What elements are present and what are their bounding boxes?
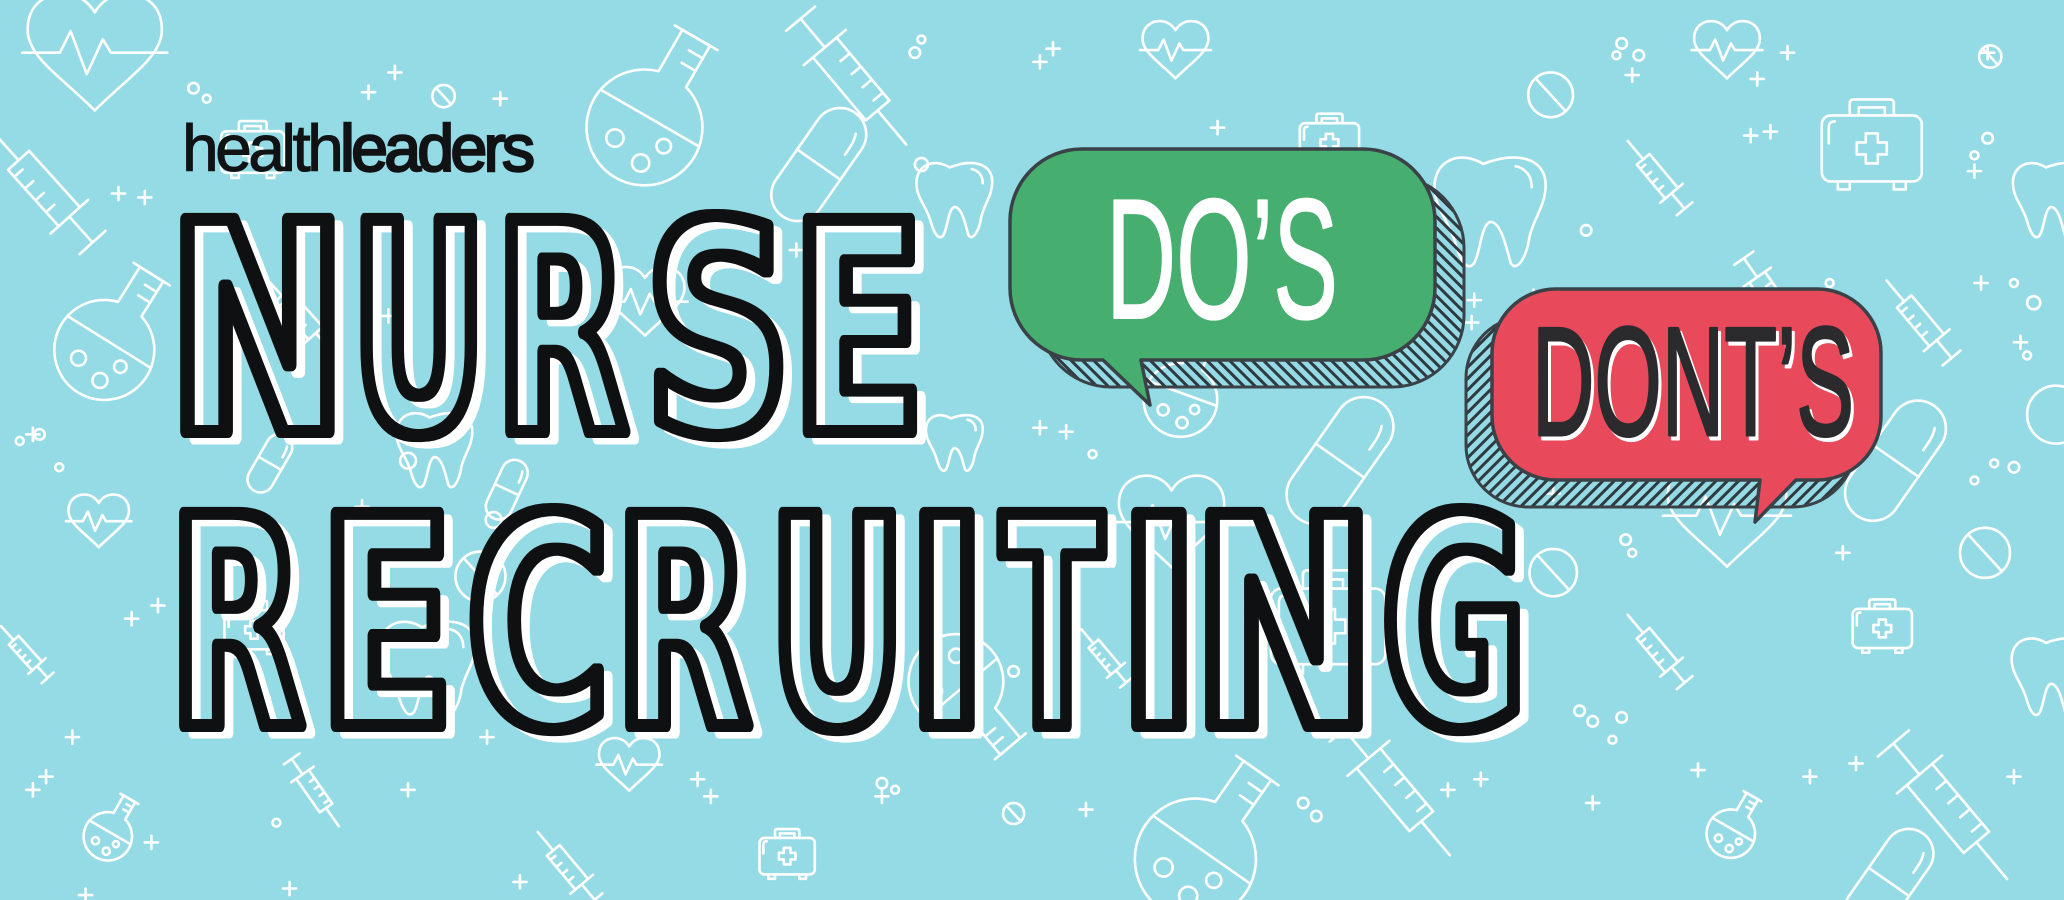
title word: RECRUITING: E (320, 456, 454, 795)
title word: NURSE: N (168, 163, 347, 501)
title word shadow: RECRUITING (178, 462, 1535, 802)
title word: RECRUITING: G (1382, 456, 1526, 794)
title word: RECRUITING: U (769, 456, 905, 794)
title word shadow: NURSE: N (177, 170, 356, 508)
label: DO'S: DO’S (1106, 164, 1338, 355)
green bubble body with tail (1010, 149, 1435, 405)
title word: RECRUITING: I (906, 455, 987, 795)
title word: RECRUITING: R (615, 456, 751, 795)
title word shadow: NURSE: E (801, 169, 933, 508)
title word: RECRUITING: N (1192, 455, 1376, 794)
hatched bubble shadow (1466, 316, 1855, 507)
title word: RECRUITING: R (170, 455, 304, 795)
title word: NURSE: S (645, 162, 791, 501)
logo: healthleaders: healthleaders (182, 111, 535, 185)
title word shadow: RECRUITING: I (916, 462, 996, 802)
title word shadow: RECRUITING: T (1010, 464, 1112, 802)
title word: NURSE: U (351, 161, 486, 500)
title word shadow: RECRUITING: U (778, 463, 914, 801)
speech bubble: Dont's (1466, 289, 1881, 522)
title word shadow: RECRUITING: C (476, 463, 619, 802)
title word shadow: RECRUITING: G (1391, 463, 1535, 801)
title word shadow: RECRUITING: R (178, 462, 313, 802)
title: Nurse Recruiting (168, 161, 1535, 802)
title word: NURSE: E (792, 162, 924, 501)
red bubble body with tail (1492, 289, 1881, 522)
title word shadow: RECRUITING: I (1128, 462, 1208, 802)
title word shadow: NURSE: R (505, 169, 637, 508)
title word shadow: RECRUITING: R (624, 463, 760, 802)
title word: NURSE (168, 161, 924, 501)
title word shadow: NURSE: U (360, 168, 495, 507)
speech bubble: Do's (1010, 149, 1464, 405)
hatched bubble shadow (1039, 176, 1464, 387)
title word: NURSE: R (496, 162, 628, 501)
title word: RECRUITING: C (467, 456, 610, 795)
title word: RECRUITING (170, 455, 1526, 795)
title word shadow: NURSE: S (654, 169, 800, 508)
title word: RECRUITING: T (1001, 457, 1103, 795)
title word shadow: RECRUITING: E (328, 463, 463, 802)
title word shadow: RECRUITING: N (1201, 462, 1385, 801)
title word: RECRUITING: I (1118, 455, 1199, 795)
title word shadow: NURSE (177, 168, 933, 508)
